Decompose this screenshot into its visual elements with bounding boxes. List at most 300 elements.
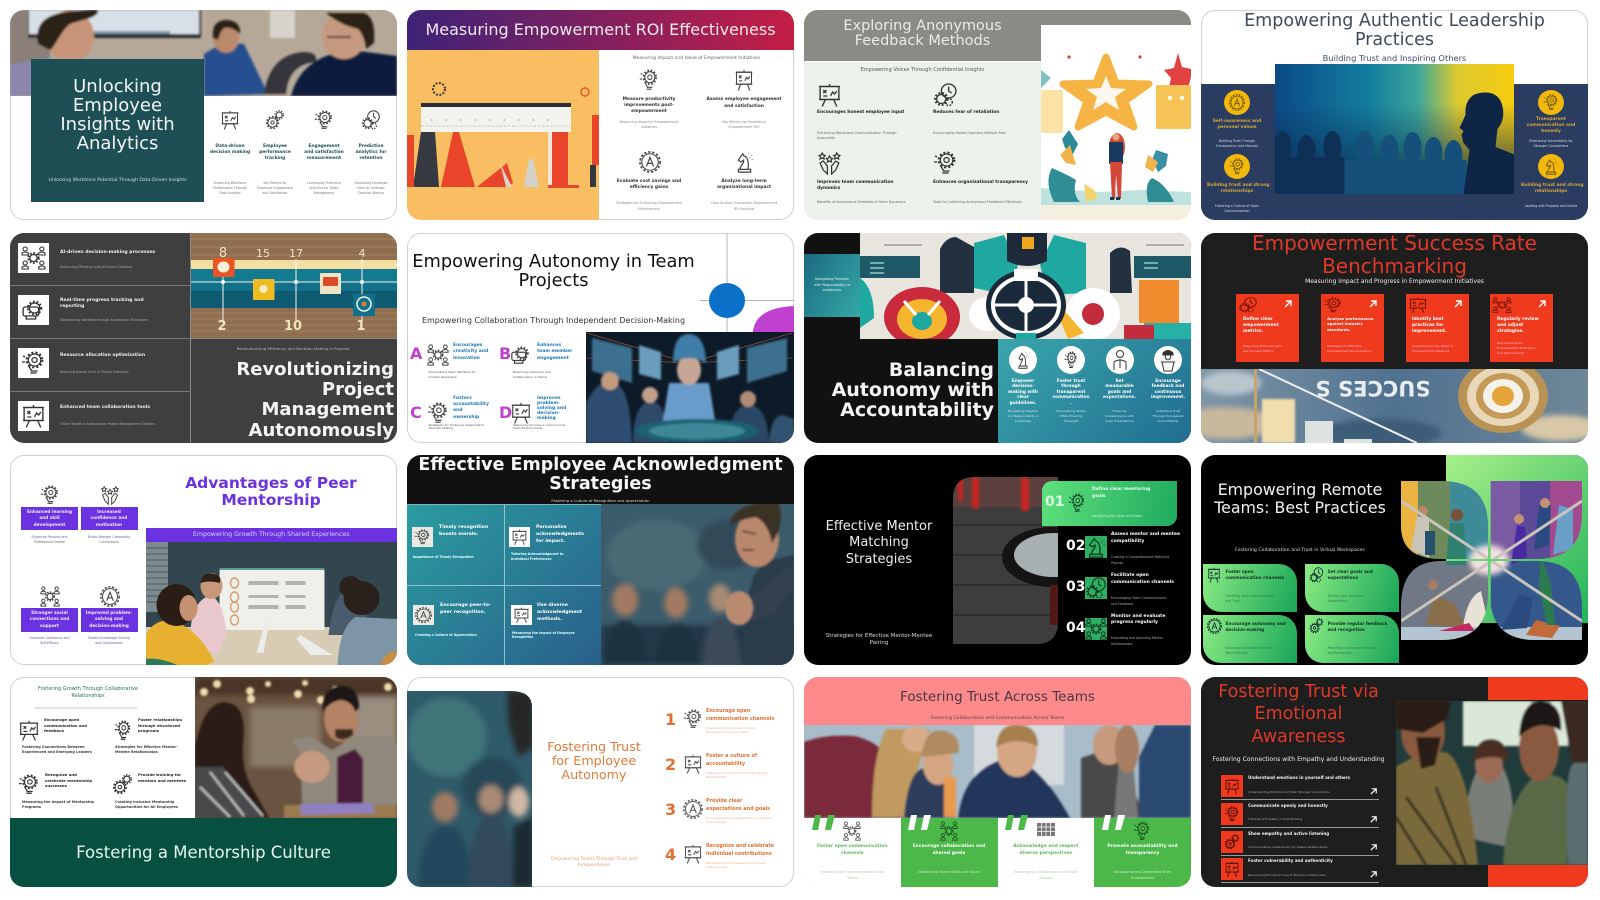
- quotation marks: [804, 813, 1191, 833]
- icon: gear: [683, 799, 703, 819]
- item title: solving and: [537, 406, 566, 411]
- column title: goals and: [1108, 390, 1131, 395]
- item text: [1521, 138, 1581, 149]
- item title: team member: [537, 349, 572, 354]
- icon: network: [18, 242, 49, 272]
- item text: Greater Ownership: [428, 374, 457, 378]
- card title: improvement.: [1412, 329, 1447, 334]
- arrow: [1283, 299, 1293, 309]
- item title: Recognize and: [45, 772, 77, 777]
- item title: Evaluate cost savings and: [617, 179, 681, 184]
- column text: Oversight: [1064, 419, 1078, 423]
- band with subtitle: [146, 528, 397, 542]
- icon: speaker at podium: [1154, 346, 1182, 374]
- column text: Achievements: [1131, 876, 1154, 880]
- item text: Enhancing Workforce: [214, 180, 246, 184]
- step title: Facilitate open: [1111, 573, 1149, 578]
- timeline image: 15: [256, 246, 270, 260]
- item title: individual contributions: [706, 851, 772, 857]
- row title: Resource allocation optimization: [60, 353, 145, 358]
- column text: Fostering Open Communication Across: [820, 870, 884, 874]
- subtitle: Fostering Collaboration and Communication Across Teams: [931, 716, 1064, 721]
- title: Empowering Autonomy in Team: [412, 250, 695, 272]
- item title: tracking: [265, 156, 285, 161]
- purple box with title: solving and: [95, 617, 123, 622]
- column title: shared goals: [933, 851, 965, 856]
- panel: Empowering Remote Teams: [1201, 455, 1588, 665]
- column text: [999, 408, 1047, 424]
- title: Benchmarking: [1322, 254, 1467, 278]
- item title: efficiency gains: [630, 185, 668, 190]
- title: Fostering Trust Across Teams: [900, 689, 1095, 705]
- title: [407, 456, 794, 494]
- purple box with title: development: [34, 522, 65, 528]
- tile: Encourage autonomy: [1203, 615, 1297, 663]
- red corner top: [1488, 677, 1588, 700]
- icon: bulb: [1068, 493, 1086, 513]
- title: Revolutionizing: [236, 359, 394, 380]
- title: Balancing: [889, 359, 994, 381]
- item: Recognize and celebrate: [18, 771, 103, 812]
- teal grid panel: [407, 504, 601, 665]
- item: Assess employee engagement: [706, 70, 782, 129]
- item text: [80, 534, 138, 546]
- card text: [1327, 344, 1372, 354]
- image: blurred team and pointing man: [407, 691, 532, 887]
- tile title: communication channels: [1226, 575, 1284, 580]
- item A: [410, 342, 498, 380]
- tile title: Encourage autonomy and: [1226, 621, 1286, 626]
- gray top strip: [804, 10, 1191, 25]
- item title: [617, 178, 681, 190]
- item text: Stronger Connections: [1534, 144, 1568, 148]
- item title: [1207, 119, 1267, 131]
- image: cafe conversation: [195, 677, 397, 818]
- item title: boosts morale.: [439, 532, 478, 537]
- icon: network: [843, 821, 861, 841]
- icon: bulb: [1133, 821, 1151, 841]
- panel: Advantages of Peer Mentorship: [10, 455, 397, 665]
- purple box with title: Improved problem-: [86, 610, 132, 616]
- item title: [356, 144, 386, 161]
- item text: Encouraging Honest Opinions Without Fear: [933, 130, 1006, 134]
- column text: [1047, 408, 1095, 424]
- item text: [513, 424, 565, 431]
- card title: metrics.: [1243, 329, 1263, 334]
- item D: [499, 392, 583, 434]
- header band with title: Measuring Empowerment ROI Effectiveness: [425, 20, 776, 39]
- green block: [1446, 455, 1588, 623]
- tile text: [1226, 594, 1274, 604]
- item title: ownership: [453, 415, 479, 420]
- column title: [1144, 378, 1192, 401]
- number: 01: [1045, 494, 1064, 510]
- title: Effective Mentor: [826, 518, 932, 534]
- step title: [1092, 487, 1150, 500]
- purple box with title: and skill: [39, 516, 60, 521]
- item title: [453, 396, 489, 421]
- column: Promote accountability: [1094, 818, 1191, 887]
- panel: Empowerment Success Rate Benchmarking: [1201, 232, 1588, 442]
- item: Building trust and strong relationships (right): [1521, 152, 1581, 216]
- number: 03: [1066, 579, 1085, 595]
- subtitle: Strategies for Effective Mentor-Mentee: [826, 632, 932, 638]
- card: Analyze performance: [1321, 294, 1384, 362]
- item title: [536, 525, 584, 546]
- column text: [804, 869, 900, 881]
- number: 4: [665, 845, 676, 864]
- item text: Key Metrics for: [263, 180, 287, 184]
- card title: against industry: [1327, 321, 1363, 326]
- tile title: [1226, 569, 1284, 580]
- column title: Acknowledge and respect: [1013, 844, 1078, 849]
- image: man pointing with blurred team: [601, 504, 794, 665]
- item title: retention: [359, 156, 383, 161]
- item text: Fosters Knowledge Sharing: [88, 636, 130, 640]
- image: team collaborating: [804, 725, 1191, 818]
- item title: performance: [259, 150, 291, 155]
- item text: [22, 744, 92, 755]
- item title: problem-: [537, 401, 560, 406]
- header block with title: Feedback Methods: [855, 33, 990, 49]
- column title: [804, 844, 900, 857]
- column title: improvement.: [1151, 395, 1185, 400]
- image: leader silhouette and crowd: [1274, 64, 1514, 194]
- icon: board: [18, 720, 40, 741]
- icon: gears: [266, 110, 284, 130]
- item text: Building Trust Through: [1219, 138, 1255, 142]
- row: Resource allocation optimization: [10, 338, 190, 392]
- item text: Performance Through: [213, 186, 247, 190]
- item title: [259, 144, 291, 161]
- card text: Empowerment Evaluation: [1497, 346, 1536, 350]
- card title: [1327, 316, 1374, 332]
- step text: Relationships: [1111, 642, 1132, 646]
- item text: [512, 630, 575, 640]
- item: Building trust and strong relationships: [1207, 152, 1267, 216]
- item text: Responsibility: [706, 775, 727, 779]
- step text: [1111, 594, 1167, 607]
- step text: Identifying Key Skills and Goals: [1092, 514, 1142, 518]
- subtitle: Measuring Impact and Progress in Empowerment Initiatives: [1305, 278, 1484, 284]
- title: Unlocking: [73, 76, 162, 97]
- item: Measure productivity improvements: [620, 70, 678, 129]
- step title: [1111, 573, 1174, 586]
- column text: [1096, 408, 1144, 424]
- subtitle: [804, 632, 954, 647]
- item text: Data for Strategic: [357, 186, 385, 190]
- row title: AI-driven decision-making processes: [60, 250, 155, 254]
- illustration: leader with gears: [860, 232, 1191, 338]
- item text: [80, 636, 138, 647]
- item text: Enhancing Workplace Communication Through: [817, 130, 897, 134]
- item title: Encourage open: [706, 708, 750, 714]
- column text: Empowering Teams: [1056, 408, 1086, 412]
- title: Empowering Remote: [1218, 480, 1382, 499]
- item: Improves team communication dynamics: [817, 151, 927, 206]
- column text: Recognizing and Celebrating Team: [1114, 870, 1171, 874]
- column title: transparency: [1126, 851, 1159, 856]
- item text: Fostering a Culture of Accountability and: [706, 771, 767, 775]
- icon: bulb: [114, 720, 132, 741]
- item title: [138, 772, 186, 783]
- item title: and satisfaction: [304, 150, 344, 155]
- icon: book and nodes: [100, 485, 120, 505]
- item title: Use diverse: [537, 603, 568, 608]
- card title: Regularly review: [1497, 316, 1539, 322]
- title: Autonomously: [249, 420, 394, 441]
- icon: presentation board: [736, 70, 752, 91]
- subtitle: Empowering Teams Through Trust and: [551, 857, 637, 862]
- item text: ROI Analysis: [734, 207, 754, 211]
- item title: [1521, 183, 1581, 195]
- icon badge: [1224, 90, 1250, 115]
- icon: bulb gear: [18, 774, 40, 795]
- card text: Key Success Metrics: [1243, 349, 1273, 353]
- step title: Assess mentor and mentee: [1111, 532, 1180, 537]
- step title: [1111, 614, 1165, 627]
- item title: Analyze long-term: [721, 179, 767, 184]
- purple box with title: Stronger social: [31, 610, 68, 616]
- item text: Transparent Communication: [706, 730, 748, 734]
- item text: [706, 816, 772, 825]
- item title: acknowledgment: [537, 610, 582, 615]
- item text: Opportunities for All Employees: [115, 805, 178, 809]
- item text: Decision-Making: [428, 426, 453, 430]
- title: Fostering Trust: [547, 738, 641, 754]
- item text: Benefits of Anonymous Feedback in Team Dynamics: [817, 200, 906, 204]
- green band with title: Fostering a Mentorship Culture: [76, 843, 331, 862]
- tile text: Setting Clear Goals and: [1328, 594, 1364, 598]
- step title: progress regularly: [1111, 620, 1158, 625]
- item text: [706, 726, 756, 735]
- item text: [616, 201, 682, 211]
- subtitle: [10, 686, 166, 699]
- icon: bulb: [40, 485, 60, 505]
- item title: Building trust and strong: [1521, 183, 1583, 188]
- step text: Encouraging Open Communication: [1111, 596, 1167, 600]
- tile text: [1328, 594, 1364, 604]
- icon: thumbs target: [1238, 297, 1258, 313]
- title: Advantages of Peer: [185, 474, 357, 492]
- item: Use diverse acknowledgment methods: [511, 605, 599, 645]
- column title: guidelines.: [1010, 401, 1036, 406]
- row text: Communicating Authentically for Deeper Relationships: [1248, 845, 1327, 849]
- row title: reporting: [60, 304, 84, 309]
- item text: Builds Stronger Community: [88, 534, 130, 538]
- item text: [428, 370, 476, 379]
- item title: through structured: [138, 723, 180, 728]
- card text: Empowerment Benchmarking: [1327, 349, 1372, 353]
- column title: [900, 844, 998, 857]
- subtitle: Pairing: [870, 640, 888, 646]
- title box: [31, 59, 204, 202]
- icon: board: [1207, 567, 1221, 583]
- tile: Provide regular feedback: [1305, 615, 1399, 663]
- item text: [307, 180, 341, 194]
- row: Communicate openly: [1221, 803, 1379, 828]
- item title: [537, 396, 566, 422]
- row: Understand emotions: [1221, 775, 1379, 800]
- title: for Employee: [552, 752, 636, 768]
- row text: Streamlining Workflow through Automation Techniques: [60, 318, 148, 322]
- item: Reduces fear of retaliation: [933, 83, 1006, 134]
- item title: Encourages: [453, 342, 482, 348]
- card title: Define clear: [1243, 316, 1273, 322]
- item text: Recognizing and Celebrating Employee: [706, 861, 765, 865]
- icon: chess knight: [1009, 346, 1037, 374]
- photo: analytics meeting: [10, 10, 397, 96]
- item title: decision-: [537, 411, 560, 416]
- item title: Transparent: [1536, 117, 1566, 122]
- panel: Fostering Trust via Emotional Awareness: [1201, 677, 1588, 887]
- card text: Measuring Empowerment:: [1243, 344, 1282, 348]
- item: Employee performance tracking: [257, 110, 293, 194]
- column text: Independence with: [1105, 414, 1134, 418]
- icon: bulb gear: [933, 151, 958, 175]
- row title: Foster vulnerability and authenticity: [1248, 858, 1333, 863]
- navy band: [1201, 84, 1588, 220]
- icon: bulb gear: [1057, 346, 1085, 374]
- item title: Enhances: [537, 342, 561, 348]
- item text: Fostering a Culture of Open: [1215, 204, 1259, 208]
- item: Provide training: [112, 771, 195, 812]
- card title: [1497, 316, 1539, 335]
- item text: Decision-Making: [358, 190, 384, 194]
- panel: Empowering Authentic Leadership Practices: [1201, 10, 1588, 220]
- item: Encourage open communication: [18, 716, 103, 757]
- item text: Connections: [99, 540, 119, 544]
- green band with title: [10, 818, 397, 887]
- column title: expectations.: [1103, 395, 1136, 400]
- tile: Set clear goals: [1305, 564, 1399, 612]
- item text: [354, 180, 388, 194]
- icon box: [1221, 858, 1243, 880]
- icon box: [509, 527, 530, 547]
- item title: acknowledgments: [536, 532, 584, 537]
- card text: [1497, 341, 1536, 355]
- panel: Unlocking Employee Insights with Analytics: [10, 10, 397, 220]
- item: Enhances organizational transparency: [933, 151, 1039, 206]
- step text: [1111, 635, 1163, 647]
- purple box with title: Enhanced learning: [27, 510, 72, 514]
- item text: Tailoring Acknowledgment to: [511, 552, 563, 556]
- item title: Foster a culture of: [706, 753, 757, 759]
- icon: projector: [510, 344, 532, 366]
- item title: engagement: [537, 356, 569, 361]
- purple box with title: [80, 507, 138, 530]
- step 04: [1066, 614, 1190, 650]
- icon: clock gears: [362, 110, 380, 130]
- step text: Process: [1111, 561, 1123, 565]
- card title: [1412, 316, 1447, 335]
- item title: Encourages honest employee input: [817, 110, 904, 115]
- item text: [22, 800, 94, 810]
- item: Foster relationships: [112, 716, 195, 757]
- icon: bulb gear: [683, 709, 703, 729]
- icon: gears: [1309, 618, 1324, 634]
- card text: Best Practices for: [1497, 341, 1523, 345]
- icon: clock gears: [934, 83, 957, 106]
- tile text: [1226, 646, 1273, 656]
- column title: channels: [841, 851, 864, 856]
- purple box with title: [21, 608, 78, 632]
- item title: honesty: [1541, 129, 1561, 134]
- item title: [1521, 117, 1581, 135]
- item text: Anonymity: [817, 136, 835, 140]
- title: Autonomy: [561, 766, 627, 782]
- row: Enhanced team collaboration tools: [10, 390, 190, 442]
- tile title: [1226, 621, 1286, 632]
- step text: [1111, 554, 1169, 566]
- purple box with title: motivation: [96, 522, 122, 528]
- step 02: [1066, 532, 1190, 568]
- item title: Assess employee engagement: [706, 97, 782, 102]
- icon: globe head: [100, 586, 120, 607]
- item: Transparent communication and honesty: [1521, 88, 1581, 150]
- item text: Experienced and Emerging Leaders: [22, 750, 92, 754]
- column title: continuous: [1155, 390, 1181, 395]
- item text: [115, 744, 178, 755]
- item text: Measuring the Impact of Employee: [512, 630, 575, 634]
- timeline image: 10: [284, 318, 302, 334]
- item title: [706, 752, 757, 768]
- item title: making: [537, 416, 556, 421]
- title: Autonomy with: [832, 379, 994, 401]
- row: AI-driven decision-making processes: [10, 232, 190, 286]
- item text: Achievements: [706, 865, 727, 869]
- item text: Analytics for Talent: [309, 186, 339, 190]
- image: holographic team: [586, 332, 794, 442]
- row text: Reducing Human Error in Project Execution: [60, 370, 129, 374]
- card title: strategies.: [1497, 329, 1524, 334]
- title: [804, 518, 954, 569]
- title: Projects: [518, 270, 589, 290]
- icon: network: [427, 344, 449, 366]
- column text: Through Transparent: [1152, 414, 1184, 418]
- title: Strategies: [846, 552, 912, 567]
- column title: [1094, 844, 1191, 857]
- title: Fostering Trust via: [1218, 682, 1379, 702]
- column title: transparent: [1057, 390, 1085, 395]
- column title: feedback and: [1152, 384, 1184, 389]
- subtitle: Fostering Growth Through Collaborative: [38, 686, 138, 692]
- title: [1201, 12, 1588, 50]
- item text: Strategies for Fostering Independent: [428, 422, 484, 426]
- item text: [513, 370, 551, 379]
- item title: Measure productivity: [623, 97, 675, 102]
- tile text: Expectations: [1328, 598, 1348, 602]
- item text: [428, 424, 484, 431]
- icon: presentation board: [819, 84, 840, 107]
- icon: network: [940, 821, 958, 841]
- arrow: [1369, 787, 1378, 796]
- item text: [1207, 138, 1267, 149]
- column title: measurable: [1105, 384, 1134, 389]
- number: 2: [665, 755, 676, 774]
- letter D: D: [499, 402, 512, 422]
- icon: bulb gear: [427, 402, 449, 424]
- item title: decision making: [210, 150, 250, 155]
- card title: Analyze performance: [1327, 316, 1374, 321]
- tile title: [1328, 569, 1373, 580]
- item 1: [665, 707, 790, 737]
- tile title: Provide regular feedback: [1328, 621, 1387, 626]
- purple box with title: confidence and: [91, 516, 127, 521]
- item title: [623, 96, 676, 114]
- content panel: [804, 62, 1041, 220]
- arrow: [1369, 870, 1378, 879]
